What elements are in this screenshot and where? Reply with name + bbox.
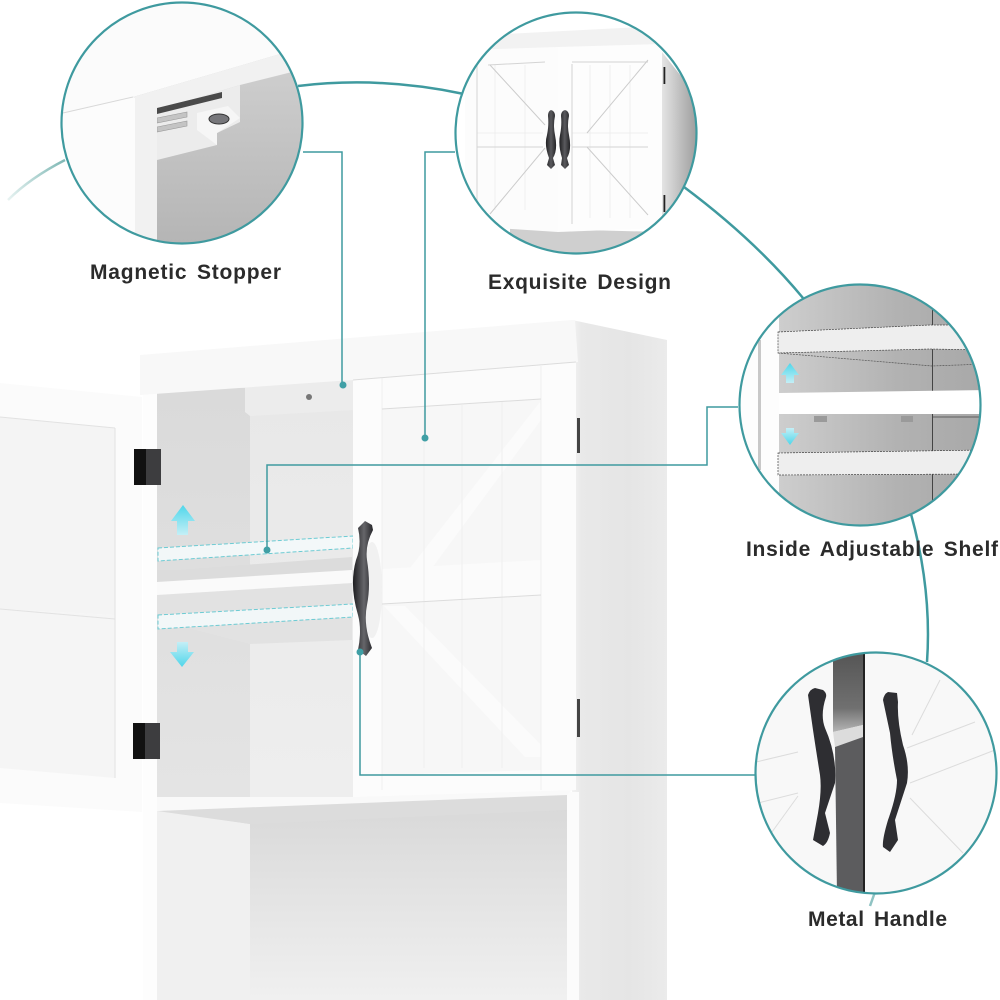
label: magnetic stopper: Magnetic Stopper xyxy=(90,261,281,284)
hinge lower xyxy=(133,723,160,759)
metal handle xyxy=(353,521,373,656)
mini arrow up xyxy=(781,363,799,383)
top crown xyxy=(140,320,578,395)
ghost shelf upper xyxy=(158,536,353,561)
circle: adjustable shelf xyxy=(735,280,985,530)
leader dots xyxy=(264,382,428,656)
connecting arc xyxy=(8,82,928,906)
cabinet illustration xyxy=(0,320,667,1000)
cabinet post xyxy=(143,394,157,1000)
arrow down xyxy=(170,642,194,667)
left handle xyxy=(808,688,835,846)
left door xyxy=(0,383,142,812)
label: metal handle: Metal Handle xyxy=(808,908,947,931)
lower open compartment xyxy=(157,790,579,1000)
leader lines xyxy=(267,152,755,775)
arrow up xyxy=(171,505,195,535)
right door xyxy=(353,362,576,797)
ghost shelf lower xyxy=(158,604,353,629)
circle: metal handle xyxy=(750,650,1000,900)
open interior xyxy=(157,380,353,797)
thumbnail handles xyxy=(546,110,556,169)
cabinet side panel xyxy=(572,320,667,1000)
handle glow xyxy=(362,542,382,638)
side hinges xyxy=(577,418,580,737)
right handle xyxy=(883,692,908,852)
shelf xyxy=(157,570,352,595)
circle: exquisite design xyxy=(450,5,700,260)
circle: magnetic stopper xyxy=(60,0,310,250)
label: exquisite design: Exquisite Design xyxy=(488,271,671,294)
label: inside adjustable shelf: Inside Adjustable Shelf xyxy=(746,538,999,561)
hinge upper xyxy=(134,449,161,485)
mini arrow down xyxy=(781,428,799,445)
